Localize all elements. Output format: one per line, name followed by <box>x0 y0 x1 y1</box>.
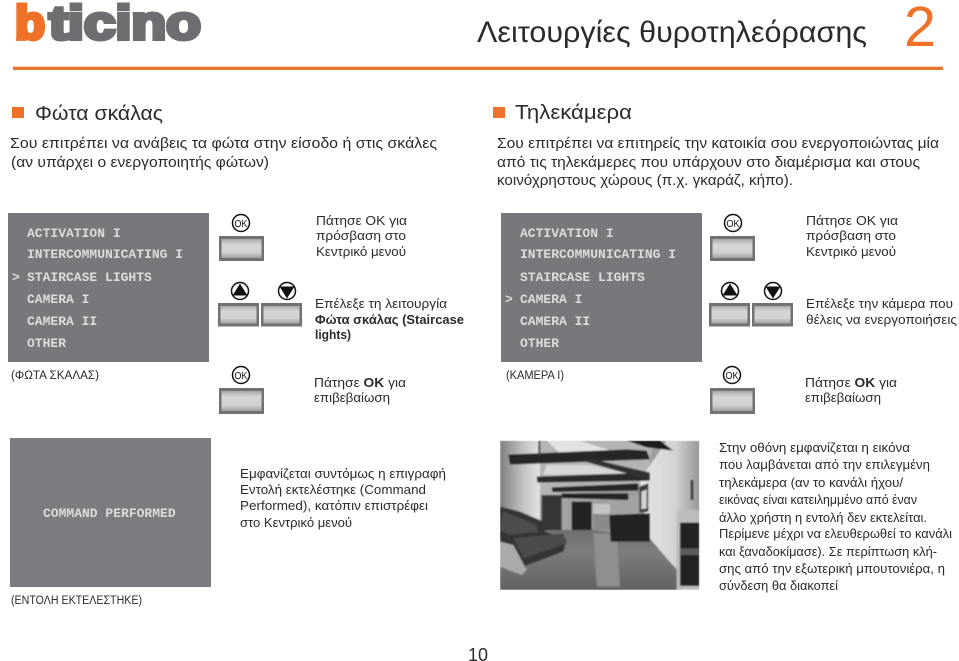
screen: menu with staircase lights selected: OTHER <box>27 336 66 351</box>
icon: OK button: OK <box>726 370 738 382</box>
instruction: access main menu: Πάτησε ΟΚ για <box>806 213 899 228</box>
instruction: choose camera: θέλεις να ενεργοποιήσεις <box>806 312 957 327</box>
heading: staircase lights: Φώτα σκάλας <box>35 103 163 125</box>
description: camera <box>497 136 939 189</box>
text: camera view explanation: Στην οθόνη εμφανίζεται η εικόνα <box>719 440 910 455</box>
instruction: choose staircase lights: lights) <box>315 327 351 342</box>
screen: menu with camera I selected: ACTIVATION I <box>520 226 614 241</box>
instruction: access main menu: Κεντρικό μενού <box>806 244 896 259</box>
instruction: confirm: Πάτησε ΟΚ για <box>314 375 407 390</box>
screen: menu with camera I selected: STAIRCASE LIGHTS <box>520 270 645 285</box>
icon: OK button <box>219 214 264 261</box>
text: camera view explanation: άλλο χρήστη η εντολή δεν εκτελείται. <box>719 510 927 525</box>
screen: menu with camera I selected <box>501 213 702 362</box>
screen: command performed <box>10 438 211 587</box>
instruction: access main menu: Κεντρικό μενού <box>316 244 406 259</box>
bullet square <box>493 107 505 118</box>
icon: OK button: OK <box>234 370 248 382</box>
description: camera: κοινόχρηστους χώρους (π.χ. γκαράζ, κήπο). <box>497 173 793 189</box>
text: camera view explanation: Περίμενε μέχρι να ελευθερωθεί το κανάλι <box>719 526 952 541</box>
screen: menu with staircase lights selected: CAMERA I <box>27 292 89 307</box>
caption: camera I: (ΚΑΜΕΡΑ Ι) <box>506 370 564 382</box>
icon: OK button: OK <box>234 218 248 230</box>
text: command performed explanation <box>240 466 446 530</box>
description: staircase lights <box>10 136 437 171</box>
icon: OK button <box>710 366 755 414</box>
text: camera view explanation: σης από την εξωτερική μπουτονιέρα, η <box>719 561 945 576</box>
icon: OK button: OK <box>726 218 740 230</box>
caption: staircase lights: (ΦΩΤΑ ΣΚΑΛΑΣ) <box>11 370 99 382</box>
description: staircase lights: Σου επιτρέπει να ανάβεις τα φώτα στην είσοδο ή στις σκάλες <box>10 136 437 152</box>
screen: menu with camera I selected: CAMERA I <box>520 292 582 307</box>
caption: command performed: (ΕΝΤΟΛΗ ΕΚΤΕΛΕΣΤΗΚΕ) <box>11 595 142 607</box>
screen: menu with staircase lights selected: CAMERA II <box>27 314 97 329</box>
description: camera: από τις τηλεκάμερες που υπάρχουν στο διαμέρισμα και στους <box>497 155 920 171</box>
instruction: access main menu <box>806 213 899 259</box>
panel: staircase lights intro <box>10 103 437 171</box>
screen: menu with staircase lights selected: ACTIVATION I <box>27 226 121 241</box>
instruction: access main menu <box>316 213 408 259</box>
instruction: confirm: επιβεβαίωση <box>314 390 390 405</box>
text: camera view explanation: που λαμβάνεται από την επιλεγμένη <box>719 457 930 472</box>
screen: menu with camera I selected: OTHER <box>520 336 559 351</box>
instruction: confirm <box>805 375 898 405</box>
instruction: access main menu: πρόσβαση στο <box>316 228 406 243</box>
title: Λειτουργίες θυροτηλεόρασης <box>477 16 867 49</box>
bullet square <box>12 107 24 118</box>
instruction: choose camera: Επέλεξε την κάμερα που <box>806 296 953 311</box>
icon: OK button <box>219 366 264 414</box>
heading: camera: Τηλεκάμερα <box>515 102 632 124</box>
instruction: access main menu: Πάτησε ΟΚ για <box>316 213 408 228</box>
photo: camera view of room interior <box>500 441 699 590</box>
text: camera view explanation: και ξαναδοκίμασε). Σε περίπτωση κλή- <box>719 544 937 559</box>
instruction: choose staircase lights: Φώτα σκάλας (Staircase <box>315 312 464 327</box>
text: command performed explanation: στο Κεντρικό μενού <box>240 515 352 530</box>
text: camera view explanation: σύνδεση θα διακοπεί <box>719 578 838 593</box>
instruction: confirm <box>314 375 407 405</box>
screen: menu with staircase lights selected: > <box>12 270 20 285</box>
description: staircase lights: (αν υπάρχει ο ενεργοποιητής φώτων) <box>11 155 269 171</box>
text: camera view explanation <box>719 440 952 593</box>
instruction: confirm: επιβεβαίωση <box>805 390 881 405</box>
icon: OK button <box>710 214 755 261</box>
instruction: choose camera <box>806 296 957 327</box>
screen: menu with camera I selected: CAMERA II <box>520 314 590 329</box>
icon: up and down buttons <box>218 282 302 326</box>
instruction: choose staircase lights <box>315 296 464 342</box>
instruction: confirm: Πάτησε ΟΚ για <box>805 375 898 390</box>
description: camera: Σου επιτρέπει να επιτηρείς την κατοικία σου ενεργοποιώντας μία <box>497 136 939 152</box>
text: command performed explanation: Εντολή εκτελέστηκε (Command <box>240 482 426 497</box>
screen: menu with staircase lights selected: STAIRCASE LIGHTS <box>27 270 152 285</box>
screen: menu with staircase lights selected: INTERCOMMUNICATING I <box>27 247 183 262</box>
icon: up and down buttons <box>709 282 793 326</box>
text: command performed explanation: Εμφανίζεται συντόμως η επιγραφή <box>240 466 446 481</box>
text: camera view explanation: τηλεκάμερα (αν το κανάλι ήχου/ <box>719 475 903 490</box>
screen: menu with camera I selected: INTERCOMMUNICATING I <box>520 247 676 262</box>
panel: camera intro <box>493 102 939 189</box>
text: command performed explanation: Performed), κατόπιν επιστρέφει <box>240 498 428 513</box>
text: camera view explanation: εικόνας είναι κατειλημμένο από έναν <box>719 492 917 507</box>
screen: command performed: COMMAND PERFORMED <box>43 506 176 521</box>
screen: menu with staircase lights selected <box>8 213 209 362</box>
instruction: access main menu: πρόσβαση στο <box>806 228 896 243</box>
instruction: choose staircase lights: Επέλεξε τη λειτουργία <box>315 296 447 311</box>
logo: bticino <box>15 0 201 49</box>
screen: menu with camera I selected: > <box>505 292 513 307</box>
